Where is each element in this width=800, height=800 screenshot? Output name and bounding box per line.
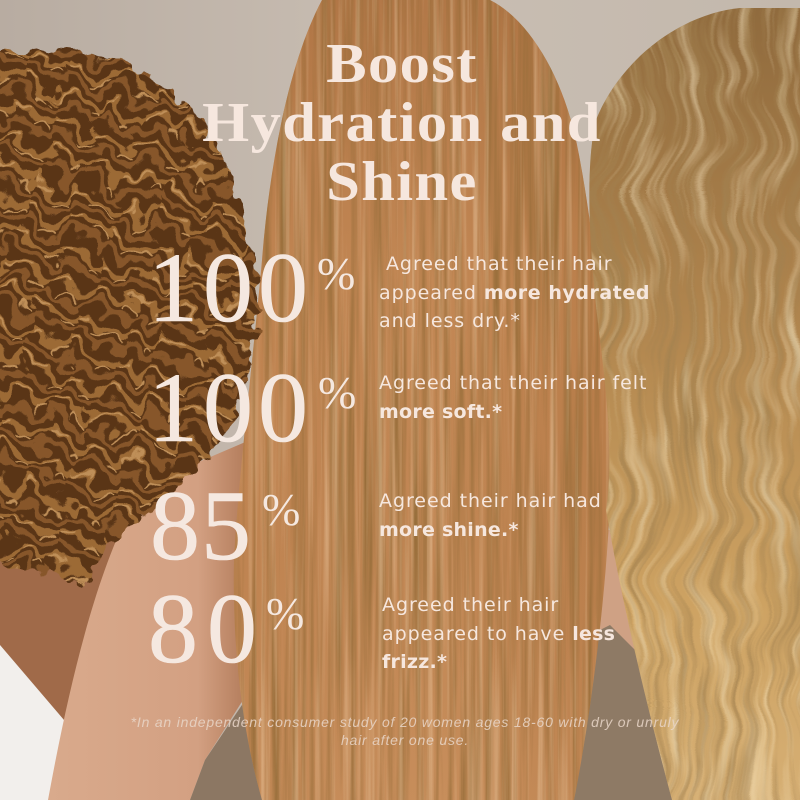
wavy blonde hair, right <box>589 8 800 800</box>
left person's back and white top <box>0 500 140 800</box>
stat: 85% more shine <box>150 470 602 581</box>
number: 100 <box>148 352 313 463</box>
percent sign: % <box>318 367 356 418</box>
title: Boost <box>326 33 478 95</box>
description: Agreed that their hair felt <box>379 372 647 394</box>
number: 80 <box>148 573 266 684</box>
stat: 100% more hydrated <box>148 232 650 343</box>
stat: 100% more soft <box>148 352 647 463</box>
description <box>379 372 647 422</box>
curly brown hair, left <box>0 47 262 588</box>
description: frizz.* <box>382 651 447 673</box>
percent sign: % <box>317 248 355 299</box>
stat: 80% less frizz <box>148 573 615 684</box>
title <box>202 33 602 213</box>
description <box>379 253 650 332</box>
footnote <box>131 714 680 748</box>
description: Agreed their hair had <box>379 490 602 512</box>
title: Hydration and <box>202 92 602 154</box>
straight auburn hair, centre <box>234 0 610 800</box>
description: appeared more hydrated <box>379 282 650 304</box>
description <box>379 490 602 540</box>
footnote: *In an independent consumer study of 20 women ages 18-60 with dry or unruly <box>131 714 679 730</box>
description: more soft.* <box>379 400 502 422</box>
description: Agreed that their hair <box>386 253 613 275</box>
description: appeared to have less <box>382 622 615 644</box>
percent sign: % <box>262 484 300 535</box>
description: Agreed their hair <box>382 594 559 616</box>
centre person's tank top <box>190 530 695 800</box>
title: Shine <box>326 151 478 213</box>
footnote: hair after one use. <box>341 732 469 748</box>
description <box>382 594 615 673</box>
centre person's shoulder and arm <box>48 440 262 800</box>
description: and less dry.* <box>379 310 521 332</box>
description: more shine.* <box>379 518 519 540</box>
number: 100 <box>148 232 313 343</box>
percent sign: % <box>266 588 304 639</box>
number: 85 <box>150 470 252 581</box>
